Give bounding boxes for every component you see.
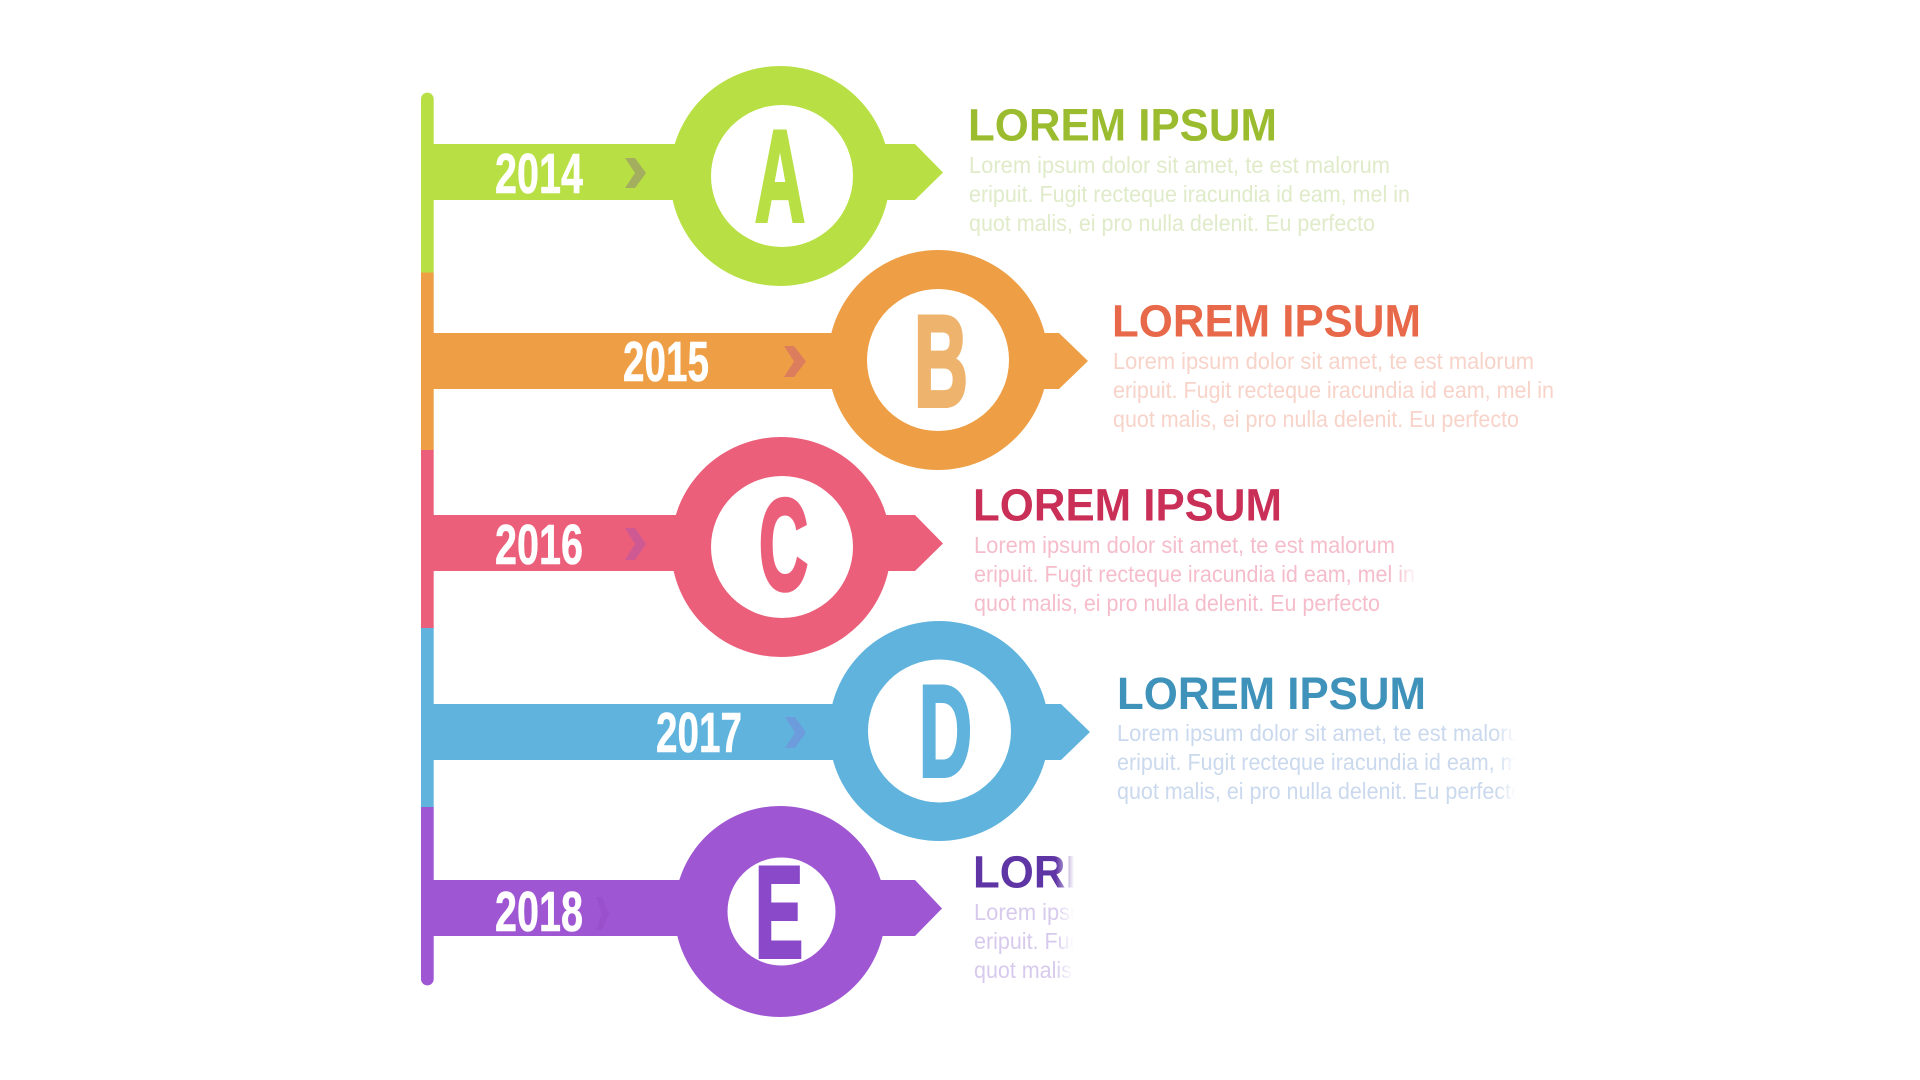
arrow bar C [433,515,943,571]
arrow bar A [433,144,943,200]
heading A: LOREM IPSUM [968,100,1277,150]
heading B: LOREM IPSUM [1112,296,1421,346]
arrow bar B [433,333,1088,389]
row D: 2017 [433,621,1558,841]
letter B: B [914,288,968,434]
body C: quot malis, ei pro nulla delenit. Eu perfecto [974,590,1380,616]
chevron B [784,346,806,377]
letter E: E [755,839,803,985]
arrow bar E [433,880,942,936]
year 2015: 2015 [623,330,709,394]
year 2017: 2017 [656,701,742,765]
body D: eripuit. Fugit recteque iracundia id eam, mel in [1117,749,1558,775]
heading D: LOREM IPSUM [1117,668,1426,719]
row A: 2014 [433,66,1410,286]
body B [1113,348,1554,432]
ring C [671,437,891,657]
body C [974,532,1415,616]
body C: eripuit. Fugit recteque iracundia id eam, mel in [974,561,1415,587]
body E: Lorem ipsum dolor sit amet, te est malorum [974,899,1395,925]
body D: quot malis, ei pro nulla delenit. Eu perfecto [1117,778,1523,804]
timeline spine [421,93,434,985]
chevron D [785,717,806,748]
year 2018: 2018 [495,880,583,944]
body B: eripuit. Fugit recteque iracundia id eam, mel in [1113,377,1554,403]
heading C: LOREM IPSUM [973,480,1282,530]
ring B [828,250,1048,470]
ring A [670,66,890,286]
body A: Lorem ipsum dolor sit amet, te est malorum [969,152,1390,178]
heading E: LOREM IPSUM [973,846,1282,898]
year 2016: 2016 [495,513,583,577]
body B: Lorem ipsum dolor sit amet, te est malorum [1113,348,1534,374]
body E [974,903,1071,983]
body D: Lorem ipsum dolor sit amet, te est malorum [1117,720,1538,746]
chevron E [596,897,609,930]
body E: quot malis, ei pro nulla delenit. Eu perfecto [974,957,1380,983]
letter C: C [759,472,808,618]
arrow bar D [433,704,1090,760]
row B: 2015 [433,250,1554,470]
row C: 2016 [433,437,1415,657]
ring E [674,806,886,1017]
chevron C [625,528,646,560]
chevron A [625,158,646,188]
body B: quot malis, ei pro nulla delenit. Eu perfecto [1113,406,1519,432]
body E: eripuit. Fugit recteque iracundia id eam, mel in [974,928,1415,954]
body A: eripuit. Fugit recteque iracundia id eam, mel in [969,181,1410,207]
body A: quot malis, ei pro nulla delenit. Eu perfecto [969,210,1375,236]
year 2014: 2014 [495,142,583,206]
body D [1118,724,1513,804]
body A [969,152,1410,236]
ring D [829,621,1049,841]
letter D: D [919,658,972,804]
body C: Lorem ipsum dolor sit amet, te est malorum [974,532,1395,558]
letter A: A [755,103,805,249]
row E: 2018 [434,806,1074,1017]
